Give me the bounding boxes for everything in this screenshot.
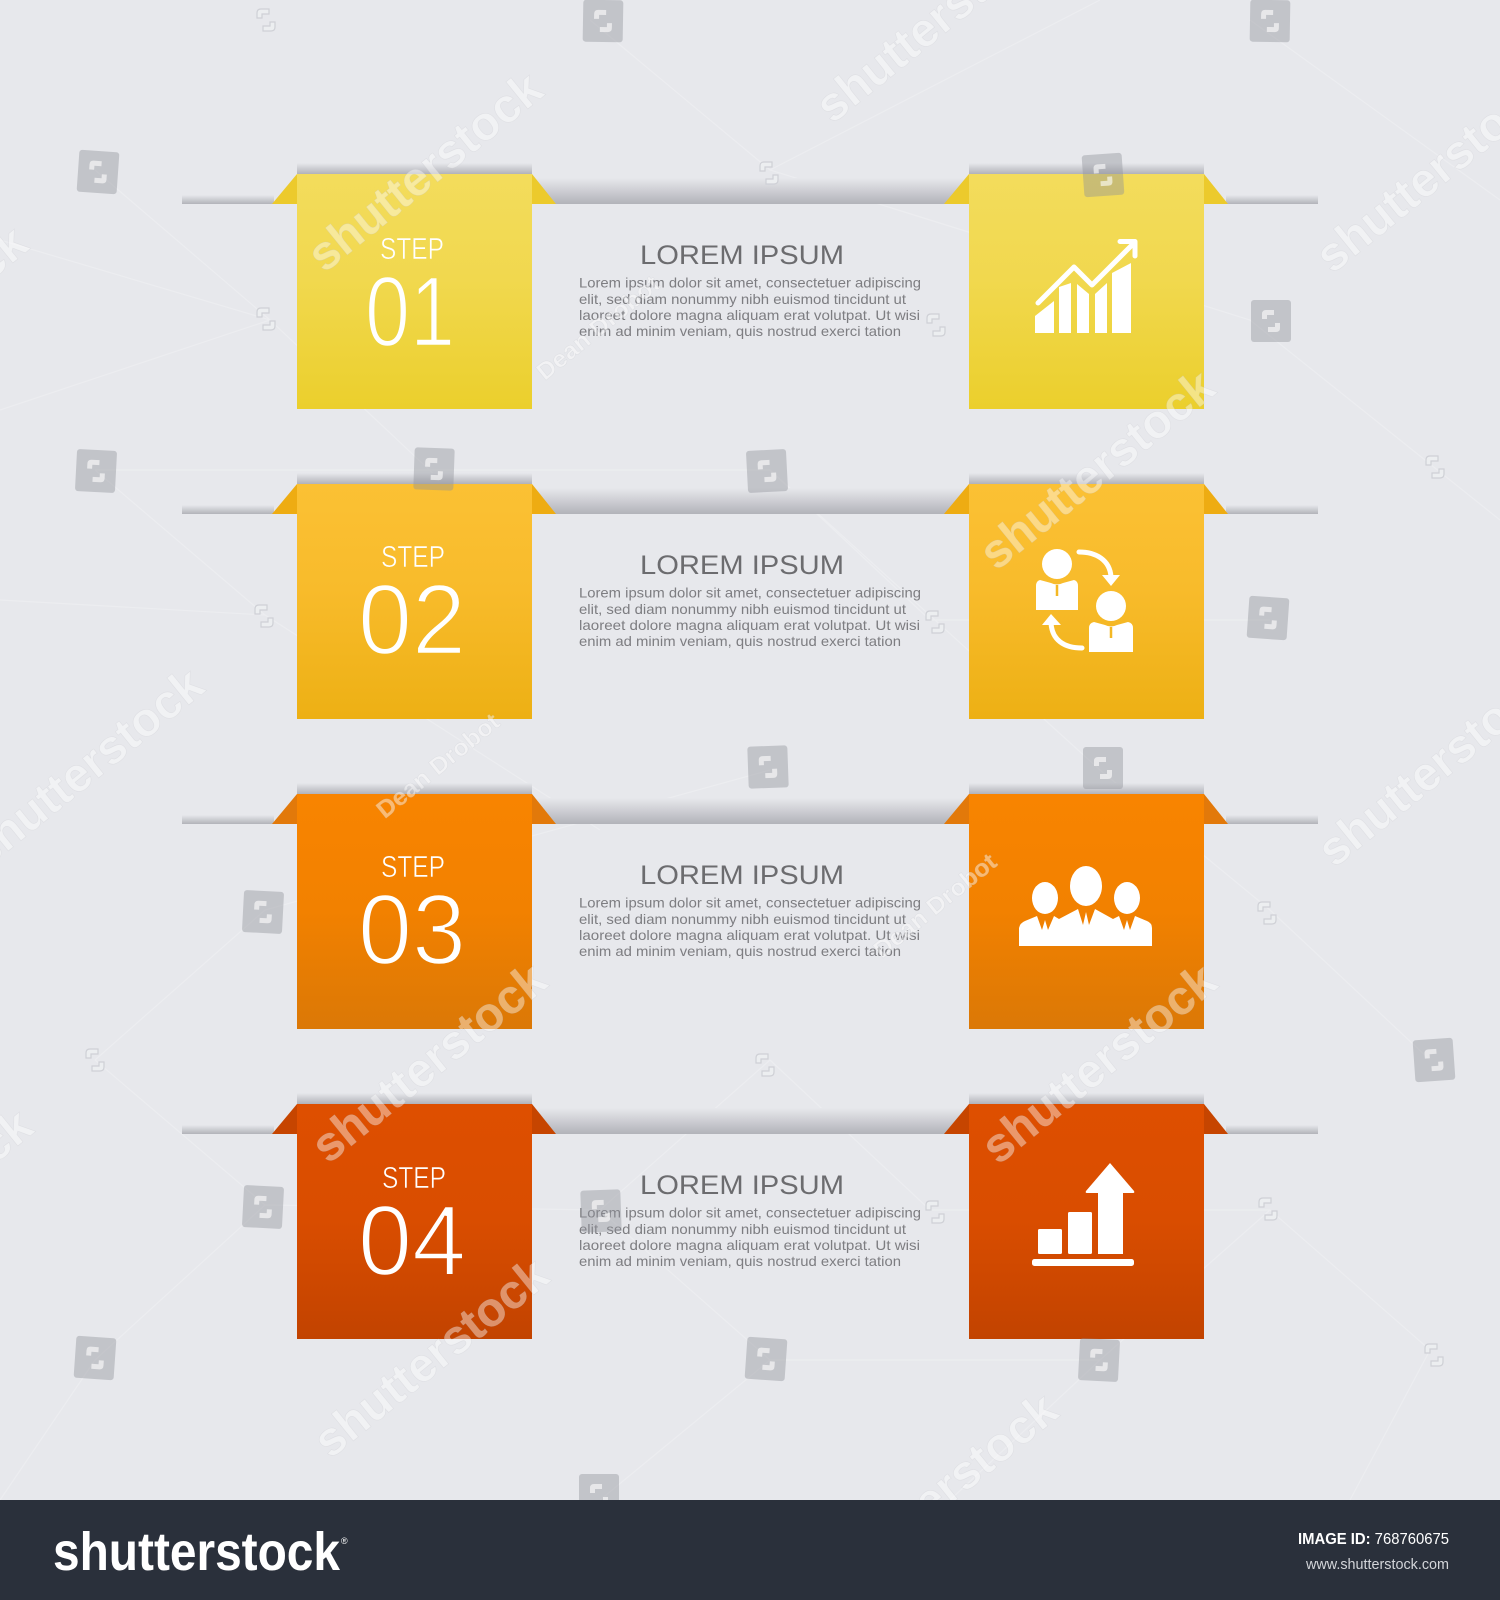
ribbon band row 4 [182,1093,1318,1134]
watermark: stock photo marks: shutterstock [302,952,557,1173]
image id: IMAGE ID: 768760675 [1298,1531,1449,1548]
watermark: stock photo marks: shutterstock [304,1247,559,1468]
step card 03: STEP [381,849,445,884]
footer bar [0,1500,1500,1600]
row 3 [182,783,1318,1029]
text block row 4: enim ad minim veniam, quis nostrud exerci tation [579,1253,901,1269]
ribbon band row 3 [182,783,1318,824]
text block row 1: LOREM IPSUM [640,240,844,270]
step card 02 [297,484,532,719]
watermark: stock photo marks: shutterstock [813,1382,1068,1600]
text block row 2: elit, sed diam nonummy nibh euismod tincidunt ut [579,601,906,617]
text block row 1: laoreet dolore magna aliquam erat volutpat. Ut wisi [579,307,920,323]
text block row 4 [579,1170,921,1269]
text block row 2: Lorem ipsum dolor sit amet, consectetuer adipiscing [579,584,921,600]
text block row 2: enim ad minim veniam, quis nostrud exerci tation [579,633,901,649]
step card 01: STEP [380,231,444,266]
registered mark: ® [341,1536,348,1546]
icon card: growth chart [969,174,1204,409]
watermark: stock photo marks: Dean Drobot [868,848,1002,964]
icon card: team of three [969,794,1204,1029]
text block row 1: Lorem ipsum dolor sit amet, consectetuer adipiscing [579,274,921,290]
ribbon band row 2 [182,473,1318,514]
step card 04: STEP [382,1160,446,1195]
text block row 2: laoreet dolore magna aliquam erat volutpat. Ut wisi [579,617,920,633]
icon card: bars with up arrow [969,1104,1204,1339]
text block row 4: laoreet dolore magna aliquam erat volutpat. Ut wisi [579,1237,920,1253]
text block row 1 [579,240,921,339]
icon card: exchange between two people [969,484,1204,719]
text block row 3: laoreet dolore magna aliquam erat volutpat. Ut wisi [579,927,920,943]
watermark: stock photo marks: shutterstock [298,61,553,282]
step card 02: 02 [358,564,466,676]
step card 03: 03 [358,874,466,986]
text block row 2: LOREM IPSUM [640,550,844,580]
text block row 3: elit, sed diam nonummy nibh euismod tincidunt ut [579,911,906,927]
row 4 [182,1093,1318,1339]
text block row 4: elit, sed diam nonummy nibh euismod tincidunt ut [579,1221,906,1237]
text block row 4: LOREM IPSUM [640,1170,844,1200]
footer logo: shutterstock [53,1522,341,1582]
watermark: stock photo marks: shutterstock [970,359,1225,580]
step card 02: STEP [381,539,445,574]
ribbon band row 1 [182,163,1318,204]
folded corners row 3 [272,794,1228,824]
folded corners row 2 [272,484,1228,514]
watermark: stock photo marks: shutterstock [972,953,1227,1174]
watermark: stock photo marks: Dean Drobot [531,270,665,386]
folded corners row 1 [272,174,1228,204]
text block row 3: enim ad minim veniam, quis nostrud exerci tation [579,943,901,959]
folded corners row 4 [272,1104,1228,1134]
watermark: stock photo marks: Dean Drobot [371,708,505,824]
step card 04: 04 [358,1185,466,1297]
text block row 4: Lorem ipsum dolor sit amet, consectetuer adipiscing [579,1204,921,1220]
step card 01: 01 [365,256,455,368]
text block row 3: Lorem ipsum dolor sit amet, consectetuer adipiscing [579,894,921,910]
website: www.shutterstock.com [1305,1556,1449,1573]
text block row 2 [579,550,921,649]
row 2 [182,473,1318,719]
text block row 3: LOREM IPSUM [640,860,844,890]
step card 03 [297,794,532,1029]
text block row 1: elit, sed diam nonummy nibh euismod tincidunt ut [579,291,906,307]
step card 04 [297,1104,532,1339]
step card 01 [297,174,532,409]
text block row 1: enim ad minim veniam, quis nostrud exerci tation [579,323,901,339]
row 1 [182,163,1318,409]
text block row 3 [579,860,921,959]
